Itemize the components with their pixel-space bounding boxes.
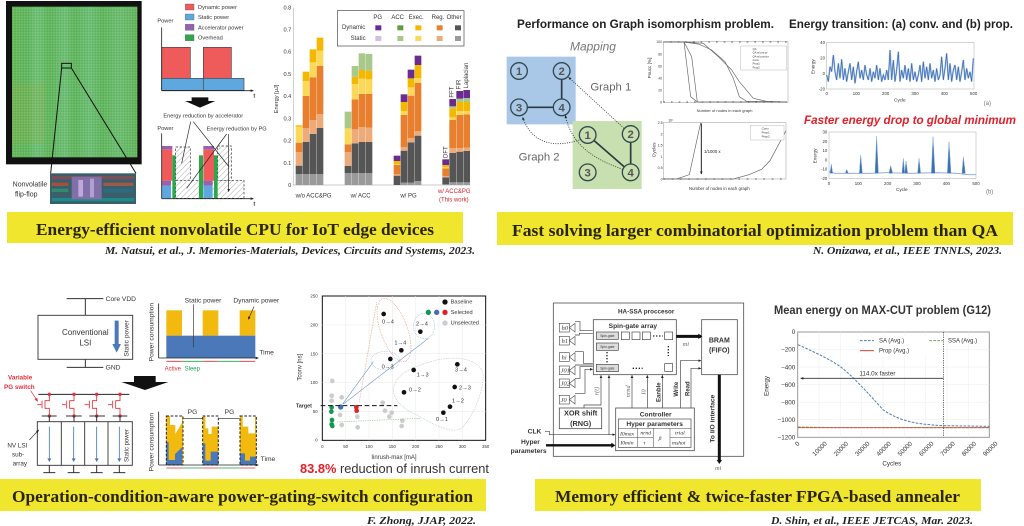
bar labels: FIR	[457, 79, 463, 89]
block diagram: HA-SSA processor: mi	[715, 465, 722, 472]
signal wires	[545, 361, 701, 435]
chart: conventional energy transition: 40	[820, 40, 826, 45]
scatter chart: inrush current: 100	[310, 380, 318, 385]
stacked bar chart: energy: 0	[288, 183, 291, 189]
h inputs: hi	[562, 354, 567, 361]
block diagram: HA-SSA processor: parameters	[511, 448, 547, 455]
scatter chart: inrush current: 2→4	[416, 321, 428, 327]
spin-gate array: Spin-gate	[600, 366, 615, 370]
chart: cycles vs nodes: 2.5	[658, 121, 663, 125]
chart: cycles vs nodes: Prop2	[762, 134, 770, 138]
line chart: mean energy: −1200	[778, 435, 796, 442]
energy legend: Other	[447, 15, 462, 21]
power consumption chart: conventional: Power consumption	[148, 303, 155, 361]
w/ ACC bars	[345, 53, 372, 185]
h inputs	[559, 323, 575, 404]
w/o ACC&PG bars	[296, 38, 323, 185]
bar labels: w/ PG	[399, 194, 417, 200]
h inputs: h0	[562, 325, 569, 332]
conventional power chart: Power	[157, 18, 173, 24]
scatter chart: inrush current: 3→4	[455, 367, 467, 373]
chart: proposed energy transition: 20	[823, 139, 828, 144]
line chart: mean energy: 114.0x faster	[859, 371, 895, 378]
line chart: mean energy: 60000	[918, 440, 936, 458]
block diagram: HA-SSA processor: CLK	[528, 429, 542, 436]
chart: proposed energy transition: 400	[943, 181, 951, 186]
line chart: mean energy: −1000	[778, 417, 796, 424]
chart: proposed energy transition: -10	[821, 167, 828, 172]
XOR shift block: XOR shift	[564, 409, 598, 418]
graph mapping diagram: Graph 2	[519, 152, 560, 164]
power consumption chart: conventional: Dynamic power	[233, 297, 280, 304]
chart: success rate vs nodes: 20	[658, 88, 662, 92]
controller block: nrnd	[640, 431, 651, 437]
NV LSI sub-array: Static power	[125, 429, 131, 462]
conventional LSI diagram: GND	[106, 364, 121, 371]
scatter chart: inrush current: 0	[321, 444, 324, 449]
stacked bar chart: energy: 0.7	[283, 27, 291, 33]
power consumption chart: power gated	[148, 409, 276, 471]
scatter chart: inrush current: 100	[365, 444, 373, 449]
stacked bar chart: energy: 0.3	[283, 116, 291, 122]
power consumption chart: conventional: Static power	[185, 297, 222, 304]
conventional LSI diagram: LSI	[79, 338, 91, 347]
line chart: mean energy: 90000	[982, 440, 1000, 458]
power consumption chart: power gated: PG	[188, 409, 197, 416]
power consumption chart: conventional: Sleep	[185, 367, 201, 373]
block diagram: HA-SSA processor: Eanble	[656, 382, 662, 402]
line chart: mean energy: 40000	[875, 440, 893, 458]
label: nonvolatile flip-flop: Nonvolatile	[13, 182, 47, 189]
banner: operation-condition-aware: Operation-condition-aware power-gating-switch configuration	[12, 487, 474, 506]
controller block	[616, 408, 694, 451]
citation: Natsui: M. Natsui, et al., J. Memories-Materials, Devices, Circuits and Systems, 2023.	[104, 245, 475, 257]
line chart: mean energy: 50000	[897, 440, 914, 458]
panel: FPGA annealer	[511, 303, 1000, 526]
chart: conventional energy transition: 400	[941, 91, 949, 96]
chart: cycles vs nodes: 0.5	[658, 166, 663, 170]
stacked bar chart: energy: 0.4	[283, 94, 291, 100]
power-gated chart: Power	[157, 126, 173, 132]
spin-gate array: Spin-gate	[600, 345, 615, 349]
controller block: I0min	[619, 440, 634, 446]
graph mapping diagram: Graph 1	[590, 82, 631, 94]
callout: 83.8% reduction: 83.8% reduction of inrush current	[300, 462, 490, 476]
line chart: mean energy	[764, 329, 1000, 468]
bar labels: DFT	[444, 146, 450, 158]
stacked bar chart: energy: 0.6	[283, 50, 291, 56]
chart: proposed energy transition: Cycle	[896, 187, 908, 192]
banner: memory efficient	[535, 479, 981, 511]
chart: cycles vs nodes: 1.5	[658, 144, 663, 148]
banner: memory efficient: Memory efficient & twice-faster FPGA-based annealer	[555, 487, 960, 506]
scatter chart: inrush current: 200	[310, 322, 318, 327]
chart: success rate vs nodes: 0	[660, 100, 662, 104]
line chart: mean energy: 0	[792, 329, 796, 336]
line chart: mean energy: 0	[794, 440, 802, 448]
scatter chart: inrush current: 1→3	[417, 372, 429, 378]
arrow: transition down	[121, 376, 168, 390]
scatter chart: inrush current: 1→4	[394, 341, 406, 347]
chart: success rate vs nodes: QA w/ post-pr	[753, 54, 769, 58]
chart: conventional energy transition: 500	[970, 91, 978, 96]
chart: cycles vs nodes: Number of nodes in each graph	[689, 186, 750, 191]
chart: conventional energy transition: Cycle	[894, 98, 906, 103]
chart: proposed energy transition: 10	[823, 148, 828, 153]
callout: faster energy drop: Faster energy drop to global minimum	[804, 113, 1016, 127]
variable PG switch array	[4, 375, 129, 422]
line chart: mean energy: SSA (Avg.)	[948, 339, 977, 345]
line chart: mean energy: 80000	[961, 440, 978, 458]
power legend: Dynamic power	[198, 5, 237, 11]
scatter chart: inrush current: 150	[389, 444, 397, 449]
scatter chart: inrush current: 350	[482, 444, 490, 449]
conventional LSI diagram: Core VDD	[106, 296, 136, 303]
chart: success rate vs nodes: 80	[658, 52, 662, 56]
bar labels	[295, 63, 471, 204]
line chart: mean energy: Prop (Avg.)	[879, 349, 909, 355]
chart: success rate vs nodes: 40	[658, 76, 662, 80]
chart: conventional energy transition: 200	[882, 91, 890, 96]
graph mapping diagram: 1	[516, 66, 522, 78]
citation: Onizawa: N. Onizawa, et al., IEEE TNNLS, 2023.	[812, 245, 1002, 257]
XOR shift block	[559, 408, 602, 429]
block diagram: HA-SSA processor: HA-SSA proccesor	[618, 309, 675, 316]
h inputs: h1	[562, 338, 568, 345]
chart: success rate vs nodes: Psucc [%]	[647, 58, 652, 78]
conventional LSI diagram: Static power	[124, 319, 131, 357]
w/ ACC&PG bars	[442, 90, 470, 185]
chart: cycles vs nodes	[651, 119, 786, 191]
line chart: mean energy: −400	[781, 364, 796, 371]
power consumption chart: conventional: Time	[259, 350, 274, 357]
bar labels: w/ ACC	[350, 194, 371, 200]
chart: proposed energy transition: -20	[821, 176, 828, 181]
power consumption chart: power gated: Power consumption	[148, 413, 155, 471]
chart: success rate vs nodes: Prop2	[753, 65, 760, 69]
controller block: Hyper parameters	[626, 421, 683, 428]
scatter chart: inrush current: Baseline	[451, 300, 472, 306]
controller block: I0max	[619, 431, 635, 437]
chart: cycles vs nodes: 1	[661, 155, 663, 159]
graph mapping diagram: 4	[559, 102, 566, 114]
chart: proposed energy transition: Energy	[813, 148, 818, 163]
conventional power chart: t	[253, 93, 255, 99]
chart: success rate vs nodes: Prop1	[753, 62, 760, 66]
chart: cycles vs nodes: Cycles	[651, 142, 657, 157]
power legend	[185, 4, 244, 42]
spin-gate array: Spin-gate	[600, 334, 615, 338]
chart: success rate vs nodes: Conv.	[753, 58, 760, 62]
power consumption chart: power gated: Time	[261, 456, 276, 463]
chart: conventional energy transition: Energy	[810, 59, 815, 74]
chart: conventional energy transition: (a)	[984, 101, 991, 107]
power-gated chart: t	[253, 201, 255, 207]
h inputs: J01	[561, 368, 570, 375]
energy legend	[337, 11, 464, 46]
chart: proposed energy transition: 300	[913, 181, 921, 186]
graph mapping diagram: 3	[516, 102, 522, 114]
chart: conventional energy transition: 300	[911, 91, 919, 96]
chart: success rate vs nodes: QA	[753, 47, 757, 51]
block diagram: HA-SSA processor: r(t)	[593, 387, 600, 395]
scatter chart: inrush current: 0→2	[409, 388, 421, 394]
energy legend: Static	[351, 36, 366, 42]
scatter chart: inrush current: 250	[310, 294, 318, 299]
line chart: mean energy: Cycles	[882, 461, 901, 468]
block diagram: HA-SSA processor: nrnd	[625, 385, 632, 397]
stacked bar chart: energy: 0.8	[283, 5, 291, 11]
line chart: mean energy: −800	[781, 399, 796, 406]
conventional LSI diagram	[38, 296, 136, 371]
chart: conventional energy transition: 0	[825, 91, 828, 96]
scatter chart: inrush current	[296, 294, 490, 461]
line chart: mean energy: 70000	[939, 440, 957, 458]
line chart: mean energy: 30000	[854, 440, 872, 458]
controller block: mshot	[672, 440, 686, 446]
scatter chart: inrush current: 50	[343, 444, 349, 449]
power consumption chart: conventional	[148, 297, 280, 373]
panel: combinatorial optimization	[497, 19, 1016, 257]
energy legend: Dynamic	[342, 25, 365, 31]
energy legend: Reg.	[432, 15, 445, 21]
graph mapping diagram: 4	[628, 167, 635, 179]
banner: energy-efficient CPU: Energy-efficient nonvolatile CPU for IoT edge devices	[36, 220, 434, 239]
bar labels: Laplacian	[464, 63, 470, 88]
scatter chart: inrush current: 300	[459, 444, 467, 449]
chart: proposed energy transition: 0	[825, 157, 828, 162]
chart: proposed energy transition: 100	[855, 181, 863, 186]
chart: cycles vs nodes: Conv.	[762, 126, 769, 130]
scatter chart: inrush current: Target	[296, 403, 312, 409]
banner: fast solving: Fast solving larger combinatorial optimization problem than QA	[512, 221, 999, 240]
scatter chart: inrush current: 0	[315, 438, 318, 443]
scatter chart: inrush current: 1→2	[452, 399, 464, 405]
scatter chart: inrush current: 0→1	[436, 417, 448, 423]
chart: conventional energy transition: 0	[823, 71, 826, 76]
chart: conventional energy transition: -20	[819, 87, 826, 92]
controller block: Controller	[640, 412, 672, 419]
stacked bar chart: energy: 0.1	[283, 161, 291, 167]
power-gated chart: Energy reduction by PG	[207, 127, 267, 133]
energy legend: Exec.	[409, 15, 424, 21]
graph mapping diagram: Mapping	[570, 40, 616, 54]
scatter chart: inrush current: 250	[435, 444, 443, 449]
XOR shift block: (RNG)	[570, 419, 592, 428]
block diagram: HA-SSA processor: Read	[686, 381, 692, 396]
power-gated chart: Energy reduction by accelerator	[163, 113, 243, 119]
NV LSI sub-array: NV LSI	[7, 442, 28, 449]
scatter chart: inrush current: Iinrush-max [mA]	[371, 455, 417, 461]
line chart: mean energy: 20000	[833, 440, 850, 458]
chart: cycles vs nodes: 10⁴	[668, 119, 674, 123]
NV LSI sub-array: sub-	[12, 451, 24, 458]
scatter chart: inrush current: Tconv [ns]	[298, 353, 304, 381]
BRAM block	[702, 320, 737, 375]
chart: success rate vs nodes: 60	[658, 64, 662, 68]
bar labels: FFT	[450, 86, 456, 98]
power legend: Overhead	[198, 36, 223, 42]
line chart: mean energy: 10000	[811, 440, 829, 458]
spin-gate array: Spin-gate array	[609, 323, 657, 330]
chart: cycles vs nodes: Prop1	[762, 130, 770, 134]
block diagram: HA-SSA processor: mi	[683, 341, 689, 348]
h inputs: J0	[561, 397, 567, 404]
graph mapping diagram: 2	[559, 66, 565, 78]
chart: success rate vs nodes	[647, 40, 788, 113]
line chart: mean energy: −600	[781, 382, 796, 389]
panel: energy-efficient nonvolatile CPU	[6, 1, 475, 257]
heading: mean energy: Mean energy on MAX-CUT problem (G12)	[774, 305, 991, 317]
power consumption chart: conventional: Active	[165, 367, 182, 373]
graph mapping diagram	[507, 40, 642, 189]
NV LSI sub-array	[7, 422, 132, 473]
chart: proposed energy transition	[813, 130, 993, 195]
bar labels: (This work)	[439, 198, 469, 204]
bar labels: w/o ACC&PG	[295, 194, 332, 200]
controller block: β	[658, 436, 662, 442]
stacked bar chart: energy: Energy [µJ]	[274, 84, 280, 113]
chart: success rate vs nodes: QA w/ pre-pr	[753, 51, 768, 55]
chip micrograph with inset	[6, 1, 142, 204]
chart: proposed energy transition: 30	[823, 130, 828, 135]
spin-gate array	[593, 320, 676, 375]
block diagram: HA-SSA processor	[511, 303, 744, 472]
chart: success rate vs nodes: Number of nodes in each graph	[697, 108, 752, 113]
controller block: trial	[675, 431, 685, 437]
graph mapping diagram: 2	[628, 129, 634, 141]
scatter chart: inrush current: 0→4	[382, 320, 394, 326]
line chart: mean energy: −200	[781, 347, 796, 354]
graph mapping diagram: 1	[585, 130, 591, 142]
chart: conventional energy transition: 100	[853, 91, 861, 96]
heading: graph isomorphism: Performance on Graph isomorphism problem.	[517, 19, 774, 31]
scatter chart: inrush current: 200	[412, 444, 420, 449]
chart: proposed energy transition: 200	[884, 181, 892, 186]
scatter chart: inrush current: 0→3	[382, 364, 394, 370]
panel: power-gating switch	[0, 294, 490, 526]
energy legend: ACC	[391, 15, 405, 21]
chart: proposed energy transition: 0	[828, 181, 831, 186]
NV LSI sub-array: array	[13, 460, 28, 467]
scatter chart: inrush current: 50	[313, 409, 318, 414]
stacked bar chart: energy: 0.5	[283, 72, 291, 78]
controller block: τ	[643, 440, 646, 446]
BRAM block: (FIFO)	[709, 348, 730, 355]
energy legend: PG	[373, 15, 382, 21]
banner: energy-efficient CPU	[7, 212, 463, 243]
label: nonvolatile flip-flop: flip-flop	[15, 192, 38, 199]
BRAM block: BRAM	[709, 338, 730, 345]
chart: proposed energy transition: (b)	[986, 189, 993, 195]
label: nonvolatile flip-flop	[13, 182, 47, 199]
power consumption chart: power gated: PG	[225, 409, 234, 416]
chart: proposed energy transition: 500	[972, 181, 980, 186]
scatter chart: inrush current: Unselected	[451, 321, 479, 327]
h inputs: J02	[561, 381, 571, 388]
graph mapping diagram: 3	[585, 167, 591, 179]
block diagram: HA-SSA processor: I0	[640, 389, 647, 396]
scatter chart: inrush current: Selected	[451, 310, 473, 316]
scatter chart: inrush current: 150	[310, 351, 318, 356]
bar labels: w/ ACC&PG	[437, 189, 471, 195]
banner: fast solving	[497, 212, 1013, 245]
chart: success rate vs nodes: 100	[656, 40, 662, 44]
block diagram: HA-SSA processor: Hyper	[521, 439, 540, 446]
variable PG switch array: Variable	[8, 375, 33, 382]
variable PG switch array: PG switch	[4, 384, 35, 391]
conventional power chart	[157, 18, 255, 99]
arrow: transition down	[185, 97, 215, 108]
power legend: Static power	[198, 15, 229, 21]
stacked bar chart: energy: 0.2	[283, 139, 291, 145]
heading: energy transition: Energy transition: (a) conv. and (b) prop.	[789, 19, 1013, 31]
chart: cycles vs nodes: 0	[661, 177, 663, 181]
power legend: Accelerator power	[198, 25, 244, 31]
conventional LSI diagram: Conventional	[62, 328, 109, 337]
w/ PG bars	[394, 56, 421, 185]
power-gated chart	[157, 113, 267, 207]
block diagram: HA-SSA processor: Write	[674, 381, 680, 397]
chart: cycles vs nodes: 2	[661, 132, 663, 136]
line chart: mean energy: SA (Avg.)	[879, 339, 904, 345]
block diagram: HA-SSA processor: To I/O interface	[710, 394, 717, 443]
stacked bar chart: energy	[274, 5, 471, 204]
chart: conventional energy transition	[810, 40, 991, 107]
chart: conventional energy transition: 20	[820, 55, 826, 60]
scatter chart: inrush current: 2→3	[459, 385, 471, 391]
chart: cycles vs nodes: 1/1000 x	[704, 149, 721, 154]
banner: operation-condition-aware	[0, 479, 486, 511]
line chart: mean energy: Energy	[764, 375, 771, 396]
